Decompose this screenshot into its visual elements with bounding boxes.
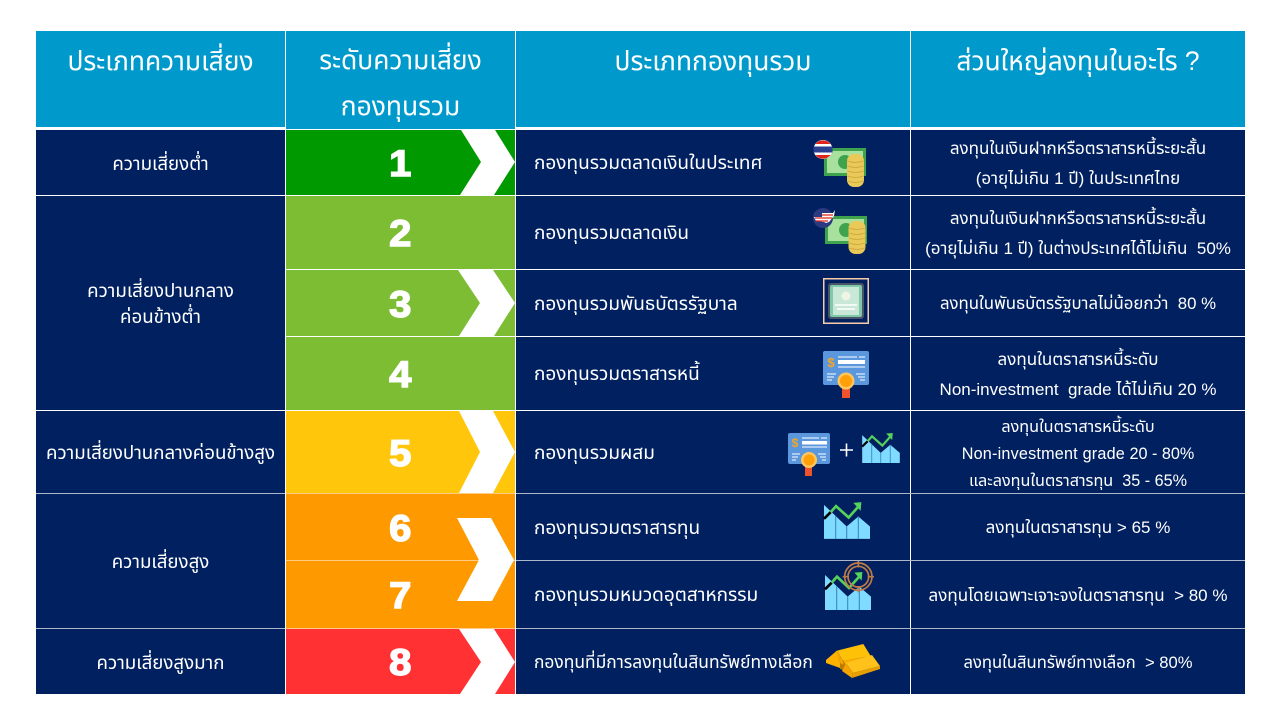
panel: fund type column [516,130,910,694]
icon: government bond document [823,278,869,324]
level 7 band: 7 [389,575,411,616]
icon: certificate plus chart: $ [792,436,799,450]
description: level 8 [911,629,1245,694]
description: level 2: (อายุไม่เกิน 1 ปี) ในต่างประเทศได้ไม่เกิน 50% [925,238,1231,258]
header: column titles [36,31,1245,127]
level 4 band: 4 [389,354,411,395]
level 7 band [286,561,515,628]
icon: gold bars [826,644,880,678]
fund: mixed: กองทุนรวมผสม [534,442,655,464]
panel: risk level column [286,130,515,694]
icon: certificate plus chart [788,433,900,476]
risk type: moderately high [36,411,285,493]
icon: sector chart with target [824,561,874,610]
heading: risk level: กองทุนรวม [341,91,460,121]
risk type: high [36,494,285,628]
risk type: very high [36,629,285,694]
description: level 3: ลงทุนในพันธบัตรรัฐบาลไม่น้อยกว่า 80 % [940,294,1216,313]
fund: debt: กองทุนรวมตราสารหนี้ [534,364,700,385]
heading: risk level [286,37,515,129]
risk type: moderately high: ความเสี่ยงปานกลางค่อนข้างสูง [46,442,275,463]
description: level 1: ลงทุนในเงินฝากหรือตราสารหนี้ระยะสั้น [950,138,1206,158]
level 1 band: 1 [389,143,411,184]
fund: sector: กองทุนรวมหมวดอุตสาหกรรม [534,585,758,606]
icon: debt certificate: $ [827,355,835,370]
description: level 8: ลงทุนในสินทรัพย์ทางเลือก > 80% [964,652,1192,672]
icon: equity chart [823,502,870,539]
icon: debt certificate [823,351,869,398]
fund: government bond: กองทุนรวมพันธบัตรรัฐบาล [534,294,738,314]
icon: USA flag with banknote and coins [813,208,867,254]
risk type: high: ความเสี่ยงสูง [112,551,209,572]
risk type: moderately low: ความเสี่ยงปานกลาง [87,280,234,301]
level 6 band: 6 [389,508,411,548]
risk type: very high: ความเสี่ยงสูงมาก [97,652,224,672]
description: level 7 [911,561,1245,628]
level 8 band [286,629,515,694]
level 6 band [286,494,515,560]
description: level 4: ลงทุนในตราสารหนี้ระดับ [998,350,1158,368]
description: level 4 [911,337,1245,410]
fund: equity: กองทุนรวมตราสารทุน [534,518,700,538]
description: level 6: ลงทุนในตราสารทุน > 65 % [986,518,1170,537]
description: level 3 [911,270,1245,336]
fund: mixed [516,411,910,493]
risk type: moderately low [36,196,285,410]
heading: fund type [516,31,910,91]
description: level 7: ลงทุนโดยเฉพาะเจาะจงในตราสารทุน > 80 % [928,586,1227,604]
panel: risk type column [36,130,285,694]
fund: alternative assets: กองทุนที่มีการลงทุนในสินทรัพย์ทางเลือก [534,652,813,672]
description: level 5: และลงทุนในตราสารทุน 35 - 65% [969,472,1187,490]
description: level 4: Non-investment grade ได้ไม่เกิน 20 % [940,380,1216,398]
panel: main investment column [911,130,1245,694]
description: level 6 [911,494,1245,560]
heading: risk level: ระดับความเสี่ยง [319,45,482,75]
description: level 5 [911,411,1245,493]
description: level 5: Non-investment grade 20 - 80% [962,445,1194,463]
header column dividers [285,31,911,127]
fund: domestic money market: กองทุนรวมตลาดเงินในประเทศ [534,153,762,174]
description: level 2: ลงทุนในเงินฝากหรือตราสารหนี้ระยะสั้น [950,208,1206,228]
icon: Thai flag with banknote and coins [814,140,866,187]
fund: equity [516,494,910,560]
fund: government bond [516,270,910,336]
description: level 1: (อายุไม่เกิน 1 ปี) ในประเทศไทย [976,168,1180,188]
level 8 band: 8 [389,642,411,683]
level 5 band: 5 [389,432,411,474]
level 4 band [286,337,515,410]
heading: risk type [36,31,285,91]
description: level 2 [911,196,1245,269]
level 3 band: 3 [389,284,411,324]
description: level 1 [911,130,1245,195]
heading: main investment: ส่วนใหญ่ลงทุนในอะไร ? [956,46,1200,76]
risk type: moderately low: ค่อนข้างต่ำ [120,306,201,327]
level 1 band [286,130,515,195]
heading: main investment [911,31,1245,91]
risk type: low: ความเสี่ยงต่ำ [112,152,209,174]
fund: domestic money market [516,130,910,195]
level 5 band [286,411,515,493]
heading: fund type: ประเภทกองทุนรวม [614,46,812,76]
risk type: low [36,130,285,195]
fund: debt [516,337,910,410]
description: level 5: ลงทุนในตราสารหนี้ระดับ [1001,418,1155,436]
fund: money market: กองทุนรวมตลาดเงิน [534,223,689,244]
fund: money market [516,196,910,269]
level 2 band: 2 [389,213,411,254]
fund: sector [516,561,910,628]
level 2 band [286,196,515,269]
heading: risk type: ประเภทความเสี่ยง [67,46,254,76]
fund: alternative assets [516,629,910,694]
level 3 band [286,270,515,336]
